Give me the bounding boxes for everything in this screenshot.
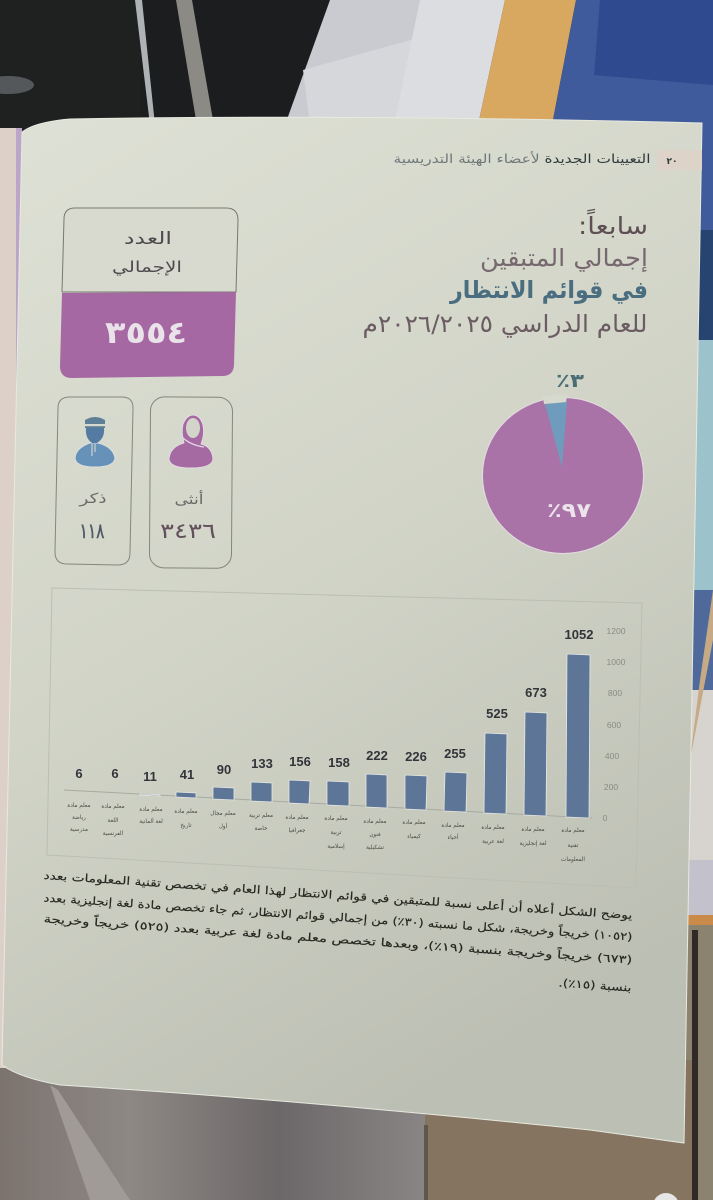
section title: إجمالي المتبقين xyxy=(480,244,648,273)
label: 97 percent: ٪٩٧ xyxy=(547,498,591,522)
value labels: 6 xyxy=(111,766,119,781)
y axis labels: 400 xyxy=(605,751,619,761)
section title: للعام الدراسي ٢٠٢٦/٢٠٢٥م xyxy=(362,310,648,338)
category labels: معلم مادة xyxy=(139,807,163,813)
page number: ٢٠ xyxy=(666,157,678,167)
category labels: تاريخ xyxy=(180,823,192,829)
category labels: تربية xyxy=(331,830,342,836)
y axis labels: 1200 xyxy=(607,626,626,636)
category labels: معلم مجال xyxy=(210,811,236,817)
female card: ٣٤٣٦ xyxy=(160,519,216,543)
y axis labels: 1000 xyxy=(607,657,626,667)
category labels: خاصة xyxy=(255,826,268,832)
category labels: معلم مادة xyxy=(561,828,585,834)
bars xyxy=(140,654,590,818)
y axis labels: 600 xyxy=(607,720,621,730)
category labels: معلم مادة xyxy=(521,827,545,833)
category labels: أحياء xyxy=(447,833,459,841)
y axis labels: 800 xyxy=(608,688,622,698)
category labels: تشكيلية xyxy=(366,844,384,851)
label: 3 percent: ٪٣ xyxy=(556,370,584,392)
page header xyxy=(394,150,702,170)
male card xyxy=(55,397,133,565)
male card: ١١٨ xyxy=(80,519,104,543)
section title: في قوائم الانتظار xyxy=(449,276,648,304)
value labels: 41 xyxy=(180,767,194,782)
category labels: معلم تربية xyxy=(249,813,273,819)
section title: سابعاً: xyxy=(578,209,648,240)
value labels: 226 xyxy=(405,749,427,764)
value labels: 156 xyxy=(289,754,311,769)
category labels: لغة ألمانية xyxy=(139,817,163,825)
female card: أنثى xyxy=(174,490,204,508)
category labels: معلم مادة xyxy=(441,823,465,829)
category labels: المعلومات xyxy=(561,857,585,863)
category labels: معلم مادة xyxy=(174,809,198,815)
category labels: اللغة xyxy=(108,818,119,824)
value labels: 133 xyxy=(251,756,273,771)
value labels: 11 xyxy=(143,769,157,784)
category labels: جغرافيا xyxy=(289,828,306,834)
total count card xyxy=(60,208,238,378)
pie notch xyxy=(543,394,567,404)
page number tab xyxy=(657,150,702,170)
male card: ذكر xyxy=(78,491,106,507)
value labels: 6 xyxy=(75,766,83,781)
total count card: الإجمالي xyxy=(112,258,182,277)
bar chart panel xyxy=(47,588,642,888)
value labels xyxy=(75,627,593,784)
explanatory paragraph: (١٠٥٢) خريجاً وخريجة، شكل ما نسبته (٣٠٪) من إجمالي قوائم الانتظار، ثم جاء تخصص مادة لغة إنجليزية بعدد xyxy=(43,889,633,944)
category labels: معلم مادة xyxy=(402,820,426,826)
icon: woman in headscarf xyxy=(169,415,213,468)
icon: man in cap xyxy=(75,417,115,467)
category labels: أول xyxy=(219,822,228,830)
value labels: 525 xyxy=(486,706,508,721)
value labels: 1052 xyxy=(565,627,593,642)
value labels: 90 xyxy=(217,762,231,777)
y axis labels xyxy=(603,626,626,823)
running title: التعيينات الجديدة لأعضاء الهيئة التدريسية xyxy=(394,151,650,167)
category labels xyxy=(67,803,585,863)
category labels: تقنية xyxy=(568,843,579,849)
category labels: معلم مادة xyxy=(481,825,505,831)
y axis labels: 200 xyxy=(604,782,618,792)
explanatory paragraph: بنسبة (١٥٪). xyxy=(558,976,632,995)
category labels: معلم مادة xyxy=(285,815,309,821)
female card xyxy=(149,397,233,568)
value labels: 158 xyxy=(328,755,350,770)
pie slice: 3 percent xyxy=(545,402,567,467)
category labels: معلم مادة xyxy=(101,804,125,810)
y axis labels: 0 xyxy=(603,813,608,823)
category labels: فنون xyxy=(369,832,381,838)
category labels: مدرسية xyxy=(70,827,88,833)
right edge strips xyxy=(660,230,713,340)
category labels: رياضة xyxy=(72,815,86,821)
total count card: ٣٥٥٤ xyxy=(105,315,187,351)
category labels: كيمياء xyxy=(407,833,421,840)
category labels: لغة عربية xyxy=(482,839,504,845)
category labels: معلم مادة xyxy=(363,819,387,825)
value labels: 255 xyxy=(444,746,466,761)
category labels: معلم مادة xyxy=(67,803,91,809)
total count card: العدد xyxy=(124,229,172,249)
explanatory paragraph xyxy=(43,868,633,995)
explanatory paragraph: (٦٧٣) خريجاً وخريجة بنسبة (١٩٪)، وبعدها تخصص معلم مادة لغة عربية بعدد (٥٢٥) خريجاً وخريجة xyxy=(43,910,633,967)
baseline xyxy=(64,790,592,818)
category labels: إسلامية xyxy=(327,844,345,850)
explanatory paragraph: يوضح الشكل أعلاه أن أعلى نسبة للمتبقين في قوائم الانتظار لهذا العام في تخصص تقنية المعلومات بعدد xyxy=(43,868,633,922)
section title xyxy=(362,209,648,338)
value labels: 673 xyxy=(525,685,547,700)
category labels: الفرنسية xyxy=(103,831,124,837)
pie chart xyxy=(482,370,644,554)
value labels: 222 xyxy=(366,748,388,763)
category labels: معلم مادة xyxy=(324,816,348,822)
category labels: لغة إنجليزية xyxy=(519,841,547,847)
